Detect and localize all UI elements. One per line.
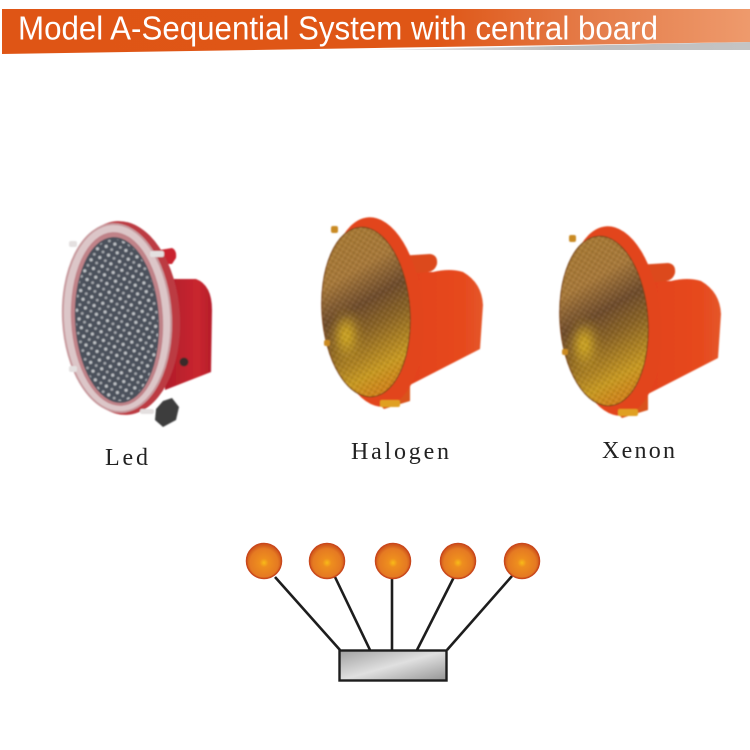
central board xyxy=(340,650,446,680)
inner red ring xyxy=(67,230,167,408)
knob xyxy=(155,398,179,427)
orange band xyxy=(2,9,750,54)
title: Model A-Sequential System with central board xyxy=(18,10,658,48)
label: Led: Led xyxy=(105,445,148,471)
rear housing xyxy=(165,279,212,390)
clear lens ring xyxy=(58,221,176,415)
label: Xenon: Xenon xyxy=(602,438,675,464)
LED panel xyxy=(71,235,163,405)
lights xyxy=(246,544,540,578)
top mounting tab xyxy=(160,248,176,264)
label: Halogen: Halogen xyxy=(351,439,449,465)
lamp: LED xyxy=(58,218,212,427)
LED dots xyxy=(72,237,162,403)
lamp: xenon xyxy=(554,222,721,420)
red rim xyxy=(59,218,185,418)
grey wedge xyxy=(370,42,750,50)
side switch xyxy=(180,358,188,366)
lamp: halogen xyxy=(316,213,483,411)
diagram: sequential wiring xyxy=(246,544,540,680)
connecting wires xyxy=(275,576,512,650)
header banner xyxy=(2,9,750,54)
lens bolts xyxy=(69,241,164,414)
